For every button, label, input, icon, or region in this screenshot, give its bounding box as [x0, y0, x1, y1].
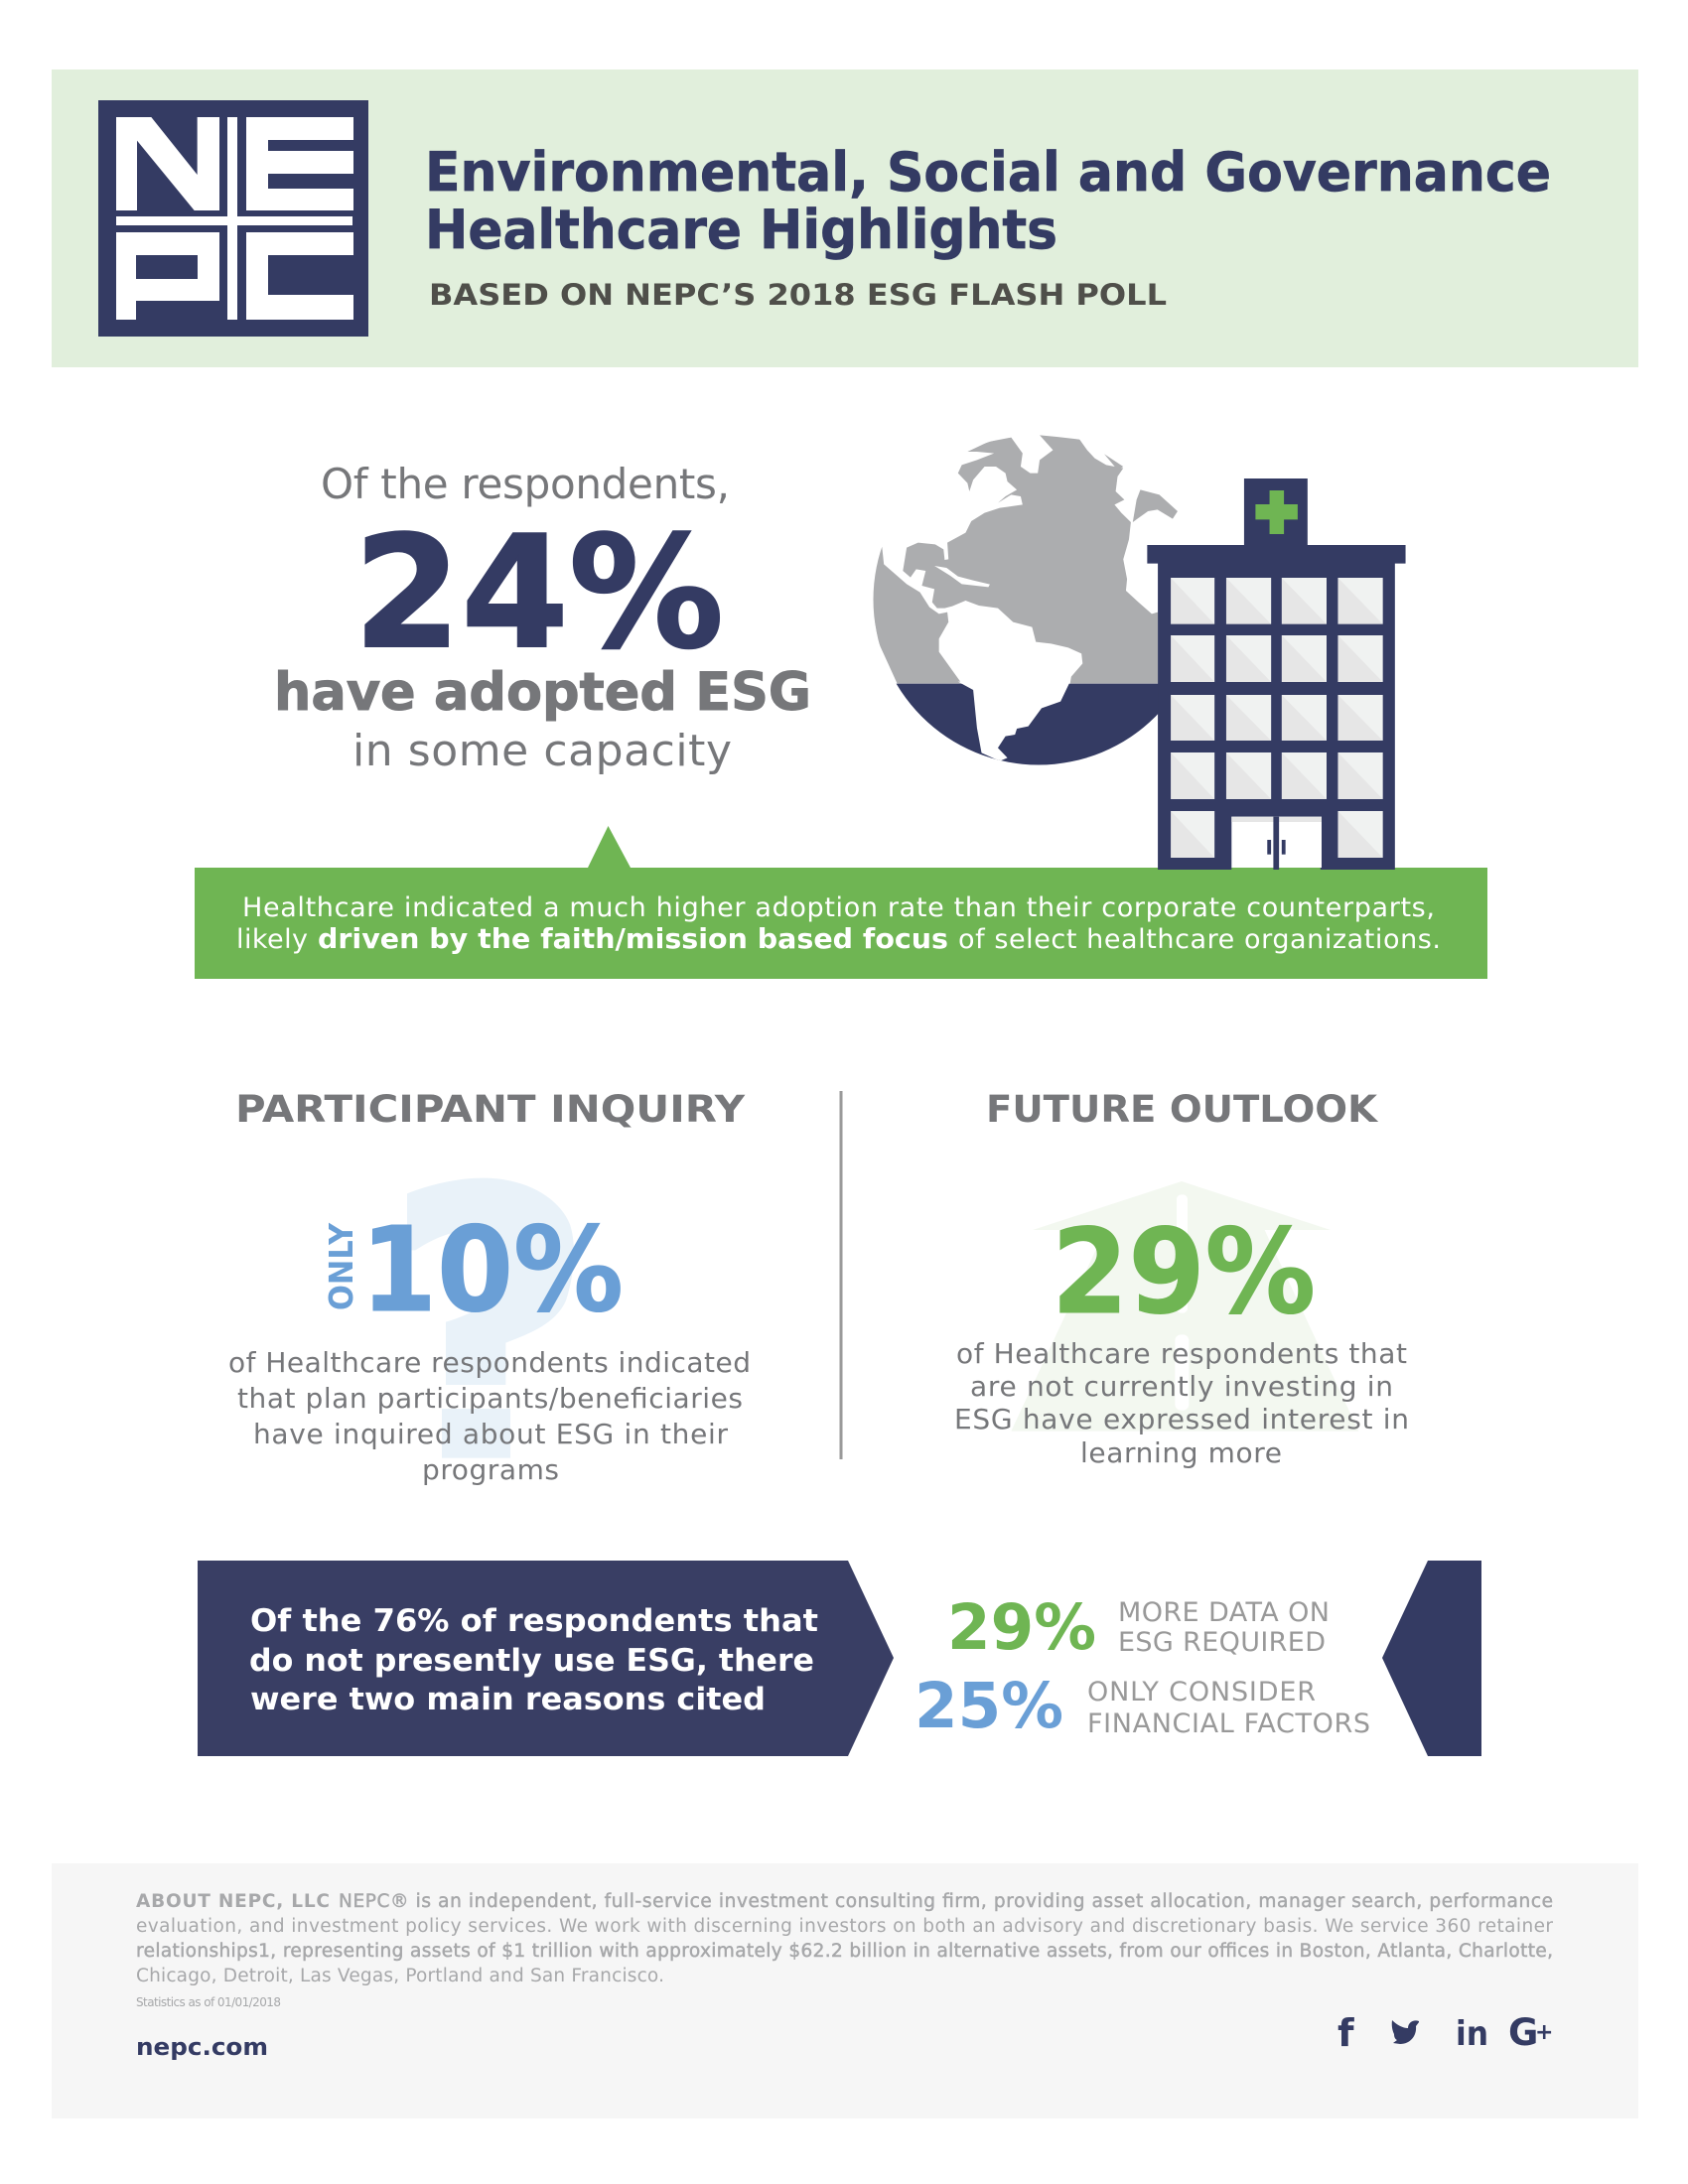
about text: NEPC® is an independent, full-service investment consulting firm, providing asset allocation, manager search, performance — [339, 1891, 1553, 1912]
banner: reasons cited: do not presently use ESG, there — [249, 1643, 814, 1679]
about text: evaluation, and investment policy services. We work with discerning investors on both an advisory and discretionary basis. We service 360 retainer — [136, 1916, 1553, 1937]
icon: google plus: G — [1508, 2011, 1538, 2054]
label: only: ONLY — [322, 1222, 360, 1310]
reason: financial factors only — [914, 1670, 1370, 1742]
title: Healthcare Highlights — [425, 199, 1057, 261]
description: of Healthcare respondents indicated — [228, 1346, 751, 1379]
hospital windows — [1171, 578, 1383, 858]
title: Environmental, Social and Governance — [425, 141, 1551, 204]
description — [954, 1337, 1409, 1469]
icon: linkedin: in — [1456, 2014, 1488, 2054]
description: learning more — [1080, 1436, 1282, 1469]
banner: reasons cited — [198, 1561, 894, 1756]
description: that plan participants/beneficiaries — [237, 1382, 743, 1415]
illustration: globe — [874, 435, 1178, 764]
reason: financial factors only: 25% — [914, 1670, 1063, 1742]
panel: participant inquiry — [228, 1088, 751, 1486]
footer panel — [52, 1863, 1638, 2118]
reason: more data required — [947, 1591, 1330, 1664]
Caribbean strip — [934, 566, 990, 587]
panel: future outlook — [954, 1088, 1409, 1469]
reason: more data required: ESG REQUIRED — [1118, 1627, 1326, 1658]
callout bar: healthcare adoption: driven by the faith/mission based focus — [318, 923, 948, 955]
big number: 29%: 29% — [1052, 1203, 1316, 1340]
reason: more data required: MORE DATA ON — [1118, 1597, 1330, 1628]
about text — [136, 1891, 1553, 2009]
about text: ABOUT NEPC, LLC — [136, 1891, 330, 1912]
heading: PARTICIPANT INQUIRY — [235, 1088, 746, 1131]
title — [425, 141, 1551, 261]
website: nepc.com — [136, 2033, 268, 2061]
callout bar: healthcare adoption: of select healthcare organizations. — [958, 924, 1441, 955]
banner: reasons cited: were two main reasons cited — [250, 1682, 766, 1717]
description — [228, 1346, 751, 1486]
adoption statistic text block: have adopted ESG — [274, 662, 811, 723]
adoption statistic text block: Of the respondents, — [321, 460, 730, 508]
description: programs — [422, 1453, 559, 1486]
reason: more data required: 29% — [947, 1591, 1096, 1664]
icon: upward road arrow watermark — [1011, 1181, 1358, 1432]
adoption statistic text block: in some capacity — [352, 726, 732, 776]
adoption statistic text block — [274, 460, 811, 776]
icon: medical cross — [1255, 490, 1298, 534]
description: have inquired about ESG in their — [253, 1418, 728, 1450]
reason: financial factors only: FINANCIAL FACTORS — [1087, 1708, 1370, 1739]
callout bar: healthcare adoption — [195, 826, 1487, 979]
icon: twitter — [1392, 2020, 1419, 2044]
description: ESG have expressed interest in — [954, 1403, 1409, 1435]
illustration: hospital building — [1147, 478, 1406, 870]
hospital door — [1231, 817, 1322, 870]
reason: financial factors only: ONLY CONSIDER — [1087, 1677, 1316, 1707]
big number: 10%: 10% — [360, 1201, 624, 1338]
banner: reasons cited: Of the 76% of respondents that — [250, 1603, 818, 1639]
logo: NEPC — [98, 100, 368, 337]
icon: question mark watermark — [407, 1178, 574, 1458]
subtitle: BASED ON NEPC’S 2018 ESG FLASH POLL — [429, 278, 1167, 312]
header panel — [52, 69, 1638, 367]
description: of Healthcare respondents that — [956, 1337, 1407, 1370]
callout bar: healthcare adoption: Healthcare indicated a much higher adoption rate than their corporate counterparts, — [242, 892, 1435, 923]
icon: facebook: f — [1337, 2011, 1354, 2055]
callout bar: healthcare adoption: likely — [236, 924, 308, 955]
big number: 24%: 24% — [353, 502, 724, 683]
about text: Statistics as of 01/01/2018 — [136, 1995, 281, 2009]
banner end cap — [1382, 1561, 1481, 1756]
about text: relationships1, representing assets of $1 trillion with approximately $62.2 billion in alternative assets, from our offices in Boston, Atlanta, Charlotte, — [136, 1941, 1553, 1962]
description: are not currently investing in — [970, 1370, 1393, 1403]
heading: FUTURE OUTLOOK — [986, 1088, 1378, 1131]
social icons — [1337, 2011, 1553, 2055]
about text: Chicago, Detroit, Las Vegas, Portland and San Francisco. — [136, 1966, 664, 1986]
icon: google plus sign: + — [1535, 2020, 1553, 2045]
